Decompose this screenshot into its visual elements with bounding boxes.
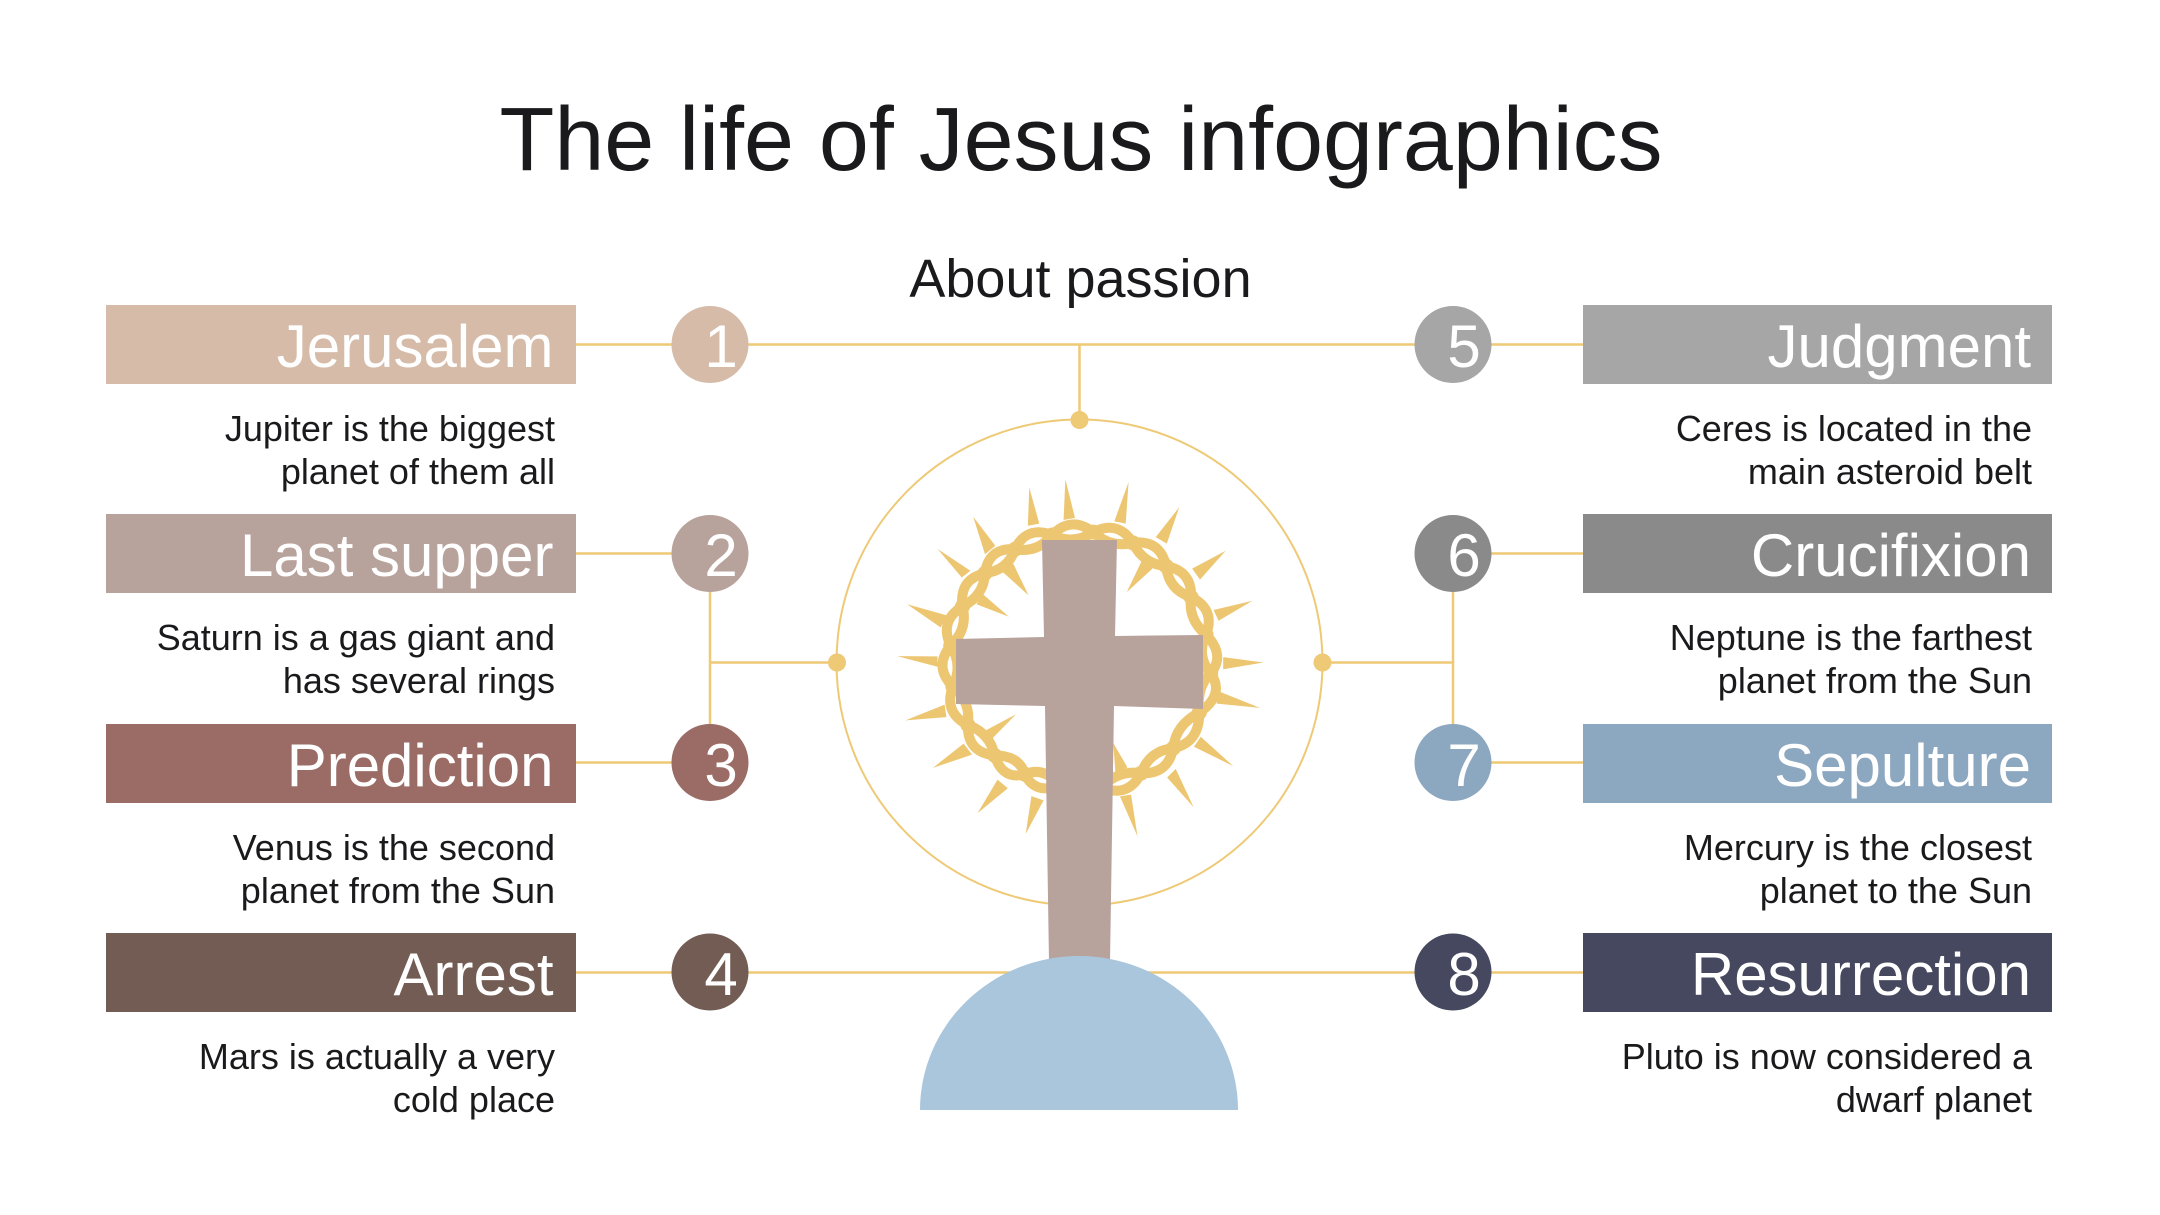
item 6: Crucifixion: Neptune is the farthest <box>1670 617 2032 658</box>
item 7: Sepulture: Sepulture <box>1774 732 2031 799</box>
halo circle <box>828 411 1332 906</box>
item 2: Last supper: Last supper <box>240 522 554 589</box>
item 2: Last supper: Saturn is a gas giant and <box>157 617 555 658</box>
item 8: Resurrection <box>1414 933 2052 1120</box>
item 4: Arrest: cold place <box>393 1079 555 1120</box>
item 7: Sepulture: planet to the Sun <box>1760 870 2032 911</box>
item 3: Prediction: Prediction <box>287 732 554 799</box>
item 4: Arrest: Arrest <box>393 941 554 1008</box>
item 1: Jerusalem <box>106 305 748 492</box>
item 6: Crucifixion: Crucifixion <box>1751 522 2031 589</box>
item 3: Prediction: planet from the Sun <box>241 870 555 911</box>
item 8: Resurrection: Pluto is now considered a <box>1622 1036 2033 1077</box>
item 1: Jerusalem: 1 <box>704 313 738 380</box>
item 8: Resurrection: dwarf planet <box>1836 1079 2032 1120</box>
item 5: Judgment: main asteroid belt <box>1748 451 2032 492</box>
icon: hill <box>920 956 1238 1110</box>
item 2: Last supper <box>106 514 748 701</box>
item 7: Sepulture <box>1414 724 2052 911</box>
item 8: Resurrection: Resurrection <box>1691 941 2031 1008</box>
item 2: Last supper: 2 <box>704 522 738 589</box>
item 5: Judgment: 5 <box>1447 313 1481 380</box>
item 3: Prediction: 3 <box>704 732 738 799</box>
item 5: Judgment: Judgment <box>1768 313 2031 380</box>
icon: cross <box>956 540 1203 962</box>
icon: crown of thorns <box>897 479 1264 836</box>
item 6: Crucifixion: 6 <box>1447 522 1481 589</box>
item 5: Judgment: Ceres is located in the <box>1676 408 2032 449</box>
title: The life of Jesus infographics <box>500 90 1662 190</box>
item 8: Resurrection: 8 <box>1447 941 1481 1008</box>
item 4: Arrest <box>106 933 748 1120</box>
item 5: Judgment <box>1414 305 2052 492</box>
item 1: Jerusalem: Jerusalem <box>277 313 554 380</box>
item 4: Arrest: 4 <box>704 941 738 1008</box>
item 3: Prediction: Venus is the second <box>233 827 555 868</box>
item 1: Jerusalem: planet of them all <box>281 451 555 492</box>
connector lines <box>576 344 1583 972</box>
item 6: Crucifixion <box>1414 514 2052 701</box>
item 4: Arrest: Mars is actually a very <box>199 1036 555 1077</box>
item 3: Prediction <box>106 724 748 911</box>
item 6: Crucifixion: planet from the Sun <box>1718 660 2032 701</box>
item 1: Jerusalem: Jupiter is the biggest <box>225 408 555 449</box>
subtitle: About passion <box>909 249 1252 309</box>
item 7: Sepulture: Mercury is the closest <box>1684 827 2032 868</box>
item 2: Last supper: has several rings <box>283 660 555 701</box>
item 7: Sepulture: 7 <box>1447 732 1481 799</box>
